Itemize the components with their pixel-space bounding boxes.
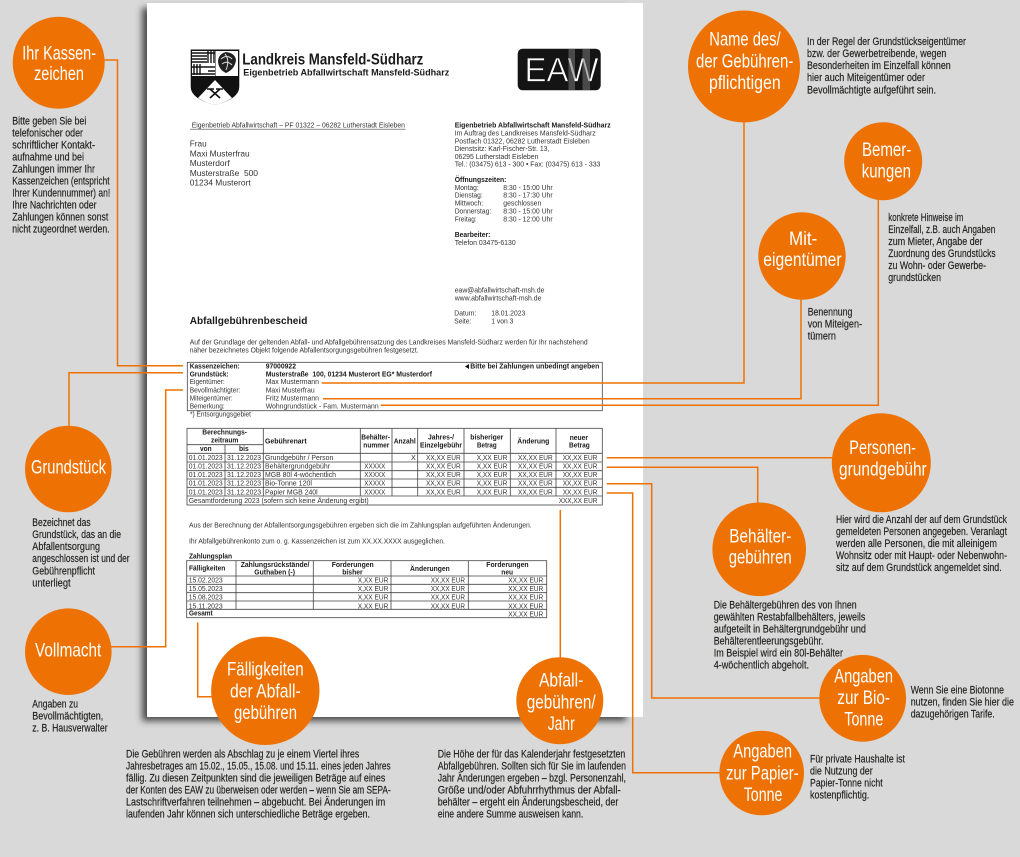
text: Name: In der Regel der Grundstückseigentümer (807, 36, 966, 48)
text: Miteigentümer: tümern (808, 331, 836, 343)
callout: Ihr Kassenzeichen (12, 17, 183, 366)
text: Bemerkungen: zum Mieter, Angabe der (888, 236, 983, 248)
payment plan table: X,XX EUR (358, 593, 388, 602)
text: Behältergebühren: 4-wöchentlich abgeholt. (714, 660, 809, 672)
fee table: Bio-Tonne 120l (265, 479, 312, 488)
fee table: Behältergrundgebühr (265, 462, 331, 471)
intro paragraph (190, 337, 588, 354)
fee table: XX,XX EUR (563, 470, 597, 479)
fee table: XX,XX EUR (518, 487, 553, 496)
fee table: XX,XX EUR (426, 453, 461, 462)
fee table: 31.12.2023 (227, 462, 261, 471)
callout: Miteigentümer (323, 212, 862, 399)
text: Kassenzeichen: Bitte geben Sie bei (12, 116, 86, 128)
text: Grundstück: unterliegt (32, 577, 71, 589)
payment plan table: neu (501, 567, 513, 576)
circle: Bemerkungen: kungen (862, 160, 911, 182)
text: Grundstück: Gebührenpflicht (32, 565, 95, 577)
fee table: XX,XX EUR (426, 487, 461, 496)
connector: Grundstück (69, 373, 183, 426)
circle: Grundstück (25, 426, 112, 512)
payment plan table: XX,XX EUR (431, 593, 465, 602)
account details box: Fritz Mustermann (266, 393, 319, 402)
text: Fälligkeiten (126, 749, 391, 821)
page shadow (142, 8, 626, 721)
circle: Papier-Tonne: zur Papier- (726, 762, 799, 784)
text: Kassenzeichen: Ihrer Kundennummer) an! (12, 188, 110, 200)
explanatory notes (189, 521, 532, 545)
sender contact block: Im Auftrag des Landkreises Mansfeld-Südharz (455, 128, 596, 137)
recipient address: 01234 Musterort (190, 178, 251, 188)
fee table: XX,XX EUR (563, 487, 597, 496)
connector: Bio-Tonne (607, 484, 820, 698)
text: Fälligkeiten: Die Gebühren werden als Abschlag zu je einem Viertel ihres (126, 749, 359, 761)
case worker (455, 230, 516, 247)
text: Name: Besonderheiten im Einzelfall können (807, 60, 951, 72)
fee table: zeitraum (211, 435, 238, 444)
payment plan table: XX,XX EUR (508, 575, 543, 584)
text: Kassenzeichen: schriftlicher Kontakt- (12, 140, 95, 152)
fee table: Grundgebühr / Person (265, 453, 333, 462)
circle: Abfallgebühren: Jahr (548, 713, 575, 735)
text: Grundstück: Grundstück, das an die (32, 529, 121, 541)
circle: Name (688, 10, 800, 122)
fee table (187, 428, 602, 505)
recipient address: Maxi Musterfrau (190, 148, 250, 158)
text: Kassenzeichen: Zahlungen können sonst (12, 212, 108, 224)
case worker: Bearbeiter: (455, 230, 490, 239)
fee table: X,XX EUR (477, 453, 507, 462)
text: Miteigentümer (808, 307, 862, 343)
circle: Personengrundgebühr (832, 413, 931, 512)
icon: EAW logo: EAW (524, 52, 598, 90)
account details box: Max Mustermann (266, 377, 319, 386)
circle: Personengrundgebühr: grundgebühr (839, 459, 927, 481)
fee table: X,XX EUR (477, 479, 507, 488)
account details box: Bemerkung: (190, 401, 225, 410)
text: Vollmacht (32, 699, 108, 735)
fee table: XX,XX EUR (563, 462, 597, 471)
text: Papier-Tonne: die Nutzung der (810, 765, 873, 777)
connector: Abfallgebühren (559, 510, 561, 658)
text: Abfallgebühren: Größe und/oder Abfuhrrhythmus der Abfall- (438, 785, 621, 797)
connector: Bemerkungen (381, 199, 878, 405)
text: Grundstück (32, 517, 130, 589)
text: Behältergebühren: gewählten Restabfallbehälters, jeweils (714, 612, 865, 624)
text: Behältergebühren: aufgeteilt in Behältergrundgebühr und (714, 624, 866, 636)
text: Abfallgebühren: Jahr Änderungen ergeben – bzgl. Personenzahl, (438, 773, 626, 785)
text: Abfallgebühren: Die Höhe der für das Kalenderjahr festgesetzten (438, 749, 625, 761)
web contact and date: Datum: (454, 309, 476, 318)
payment plan table: 15.08.2023 (189, 593, 223, 602)
payment plan table: X,XX EUR (358, 601, 388, 610)
text: Abfallgebühren: Abfallgebühren. Sollten sich für Sie im laufenden (438, 761, 626, 773)
payment plan table: Zahlungsplan (189, 551, 232, 560)
fee table: XX,XX EUR (426, 479, 461, 488)
fee table: Berechnungs- (202, 428, 248, 437)
web contact and date: 18.01.2023 (491, 309, 525, 318)
connector: Papier-Tonne (607, 493, 720, 773)
fee table: 31.12.2023 (227, 453, 261, 462)
fee table: Anzahl (394, 436, 416, 445)
payment plan table: 15.05.2023 (189, 584, 223, 593)
panel: fee notice document (147, 3, 643, 717)
circle: Bio-Tonne (819, 655, 906, 742)
sender contact block (455, 120, 611, 169)
text: Kassenzeichen (12, 116, 110, 236)
circle: Papier-Tonne: Tonne (744, 784, 782, 806)
icon: coat of arms (191, 50, 239, 105)
circle: Fälligkeiten (211, 637, 320, 745)
fee table: nummer (363, 440, 389, 449)
fee table: 01.01.2023 (189, 453, 223, 462)
fee table: 01.01.2023 (189, 487, 223, 496)
fee table: XXXXX (364, 487, 385, 496)
fee table: Änderung (517, 437, 549, 446)
fee table: X,XX EUR (477, 487, 507, 496)
payment plan table: XX,XX EUR (508, 593, 543, 602)
connector: Name (322, 121, 744, 383)
intro paragraph: näher bezeichnetes Objekt folgende Abfallentsorgungsgebühren festgesetzt. (190, 345, 419, 354)
payment plan table: XX,XX EUR (431, 601, 465, 610)
fee table: Behälter- (361, 432, 391, 441)
text: Kassenzeichen: nicht zugeordnet werden. (12, 224, 110, 236)
account details box: Bevollmächtigter: (190, 385, 240, 394)
text: Fälligkeiten: fällig. Zu diesen Zeitpunkten sind die jeweiligen Beträge auf eines (126, 773, 385, 785)
payment plan table (187, 551, 547, 619)
callout: Bemerkungen (381, 122, 996, 405)
fee table: Gesamtforderung 2023 (sofern sich keine Änderung ergibt) (189, 496, 369, 505)
connector: Miteigentümer (323, 299, 801, 399)
text: Bio-Tonne: dazugehörigen Tarife. (911, 708, 995, 720)
fee table: Einzelgebühr (420, 440, 462, 449)
fee table: 01.01.2023 (189, 470, 223, 479)
recipient address: Musterdorf (190, 158, 230, 168)
opening hours: Donnerstag: (455, 207, 491, 216)
circle: Miteigentümer (758, 212, 846, 300)
circle: Name: der Gebühren- (696, 51, 793, 73)
circle: Kassenzeichen (13, 17, 105, 109)
account details box: Maxi Musterfrau (266, 385, 315, 394)
circle: Bemerkungen (844, 122, 922, 200)
text: Name: hier auch Miteigentümer oder (807, 72, 925, 84)
fee table: XX,XX EUR (518, 462, 553, 471)
opening hours: 8:30 - 15:00 Uhr (503, 183, 553, 192)
heading: district name (242, 51, 450, 79)
connector: Fälligkeiten (198, 622, 213, 697)
explanatory notes: Aus der Berechnung der Abfallentsorgungsgebühren ergeben sich die im Zahlungsplan aufgeführten Änderungen. (189, 521, 532, 530)
fee table: XX,XX EUR (518, 453, 553, 462)
account details box: Musterstraße 100, 01234 Musterort EG* Musterdorf (266, 369, 433, 378)
account details box: Wohngrundstück - Fam. Mustermann (266, 401, 379, 410)
text: Vollmacht: Angaben zu (32, 699, 78, 711)
fee table: bis (239, 444, 249, 453)
fee table: 01.01.2023 (189, 462, 223, 471)
text: Vollmacht: z. B. Hausverwalter (32, 723, 108, 735)
fee table: XX,XX EUR (518, 479, 553, 488)
web contact and date: www.abfallwirtschaft-msh.de (454, 293, 541, 302)
text: Fälligkeiten: Jahresbetrages am 15.02., 15.05., 15.08. und 15.11. eines jeden Jahres (126, 761, 391, 773)
account details box: Eigentümer: (190, 377, 225, 386)
payment plan table: XX,XX EUR (508, 584, 543, 593)
fee table: X,XX EUR (477, 462, 507, 471)
fee table: von (200, 444, 212, 453)
text: Name: Bevollmächtigte aufgeführt sein. (807, 84, 936, 96)
fee table: Betrag (477, 440, 497, 449)
account details box: *) Entsorgungsgebiet (190, 409, 251, 418)
text: Kassenzeichen: aufnahme und bei (12, 152, 84, 164)
text: Miteigentümer: von Miteigen- (808, 319, 862, 331)
callout: Grundstück (25, 373, 183, 589)
document title: Abfallgebührenbescheid (190, 315, 307, 327)
recipient address: Musterstraße 500 (190, 168, 258, 178)
sender contact block: Dienstsitz: Karl-Fischer-Str. 13, (455, 144, 549, 153)
circle: Bemerkungen: Bemer- (862, 139, 911, 161)
payment plan table: XX,XX EUR (508, 610, 543, 619)
circle: Papier-Tonne (719, 731, 804, 815)
case worker: Telefon 03475-6130 (455, 238, 516, 247)
payment plan table: Forderungen (486, 560, 529, 569)
fee table: Jahres-/ (428, 432, 454, 441)
text: Fälligkeiten: laufenden Jahr können sich unterschiedliche Beträge ergeben. (126, 809, 370, 821)
fee table: Papier MGB 240l (265, 487, 318, 496)
connector: Behältergebühren (607, 467, 758, 504)
circle: Behältergebühren: Behälter- (729, 525, 791, 547)
account details box: Miteigentümer: (190, 393, 233, 402)
callout: Personengrundgebühr (607, 413, 1008, 574)
account details box: Grundstück: (190, 369, 229, 378)
circle: Name: Name des/ (709, 29, 781, 51)
fee table: XX,XX EUR (518, 470, 553, 479)
text: Bemerkungen: zu Wohn- oder Gewerbe- (888, 260, 986, 272)
circle: Fälligkeiten: gebühren (234, 702, 297, 724)
text: Behältergebühren (714, 600, 866, 672)
circle: Vollmacht: Vollmacht (35, 640, 102, 662)
callout: Behältergebühren (607, 467, 866, 672)
circle: Bio-Tonne: Angaben (834, 665, 893, 687)
explanatory notes: Ihr Abfallgebührenkonto zum o. g. Kassenzeichen ist zum XX.XX.XXXX ausgeglichen. (189, 536, 445, 545)
opening hours: Montag: (455, 183, 479, 192)
fee table: 31.12.2023 (227, 479, 261, 488)
fee table: XX,XX EUR (563, 479, 597, 488)
fee table: XXXXX (364, 462, 385, 471)
circle: Papier-Tonne: Angaben (733, 741, 792, 763)
sender contact block: Postfach 01322, 06282 Lutherstadt Eisleben (455, 136, 590, 145)
connector: Personengrundgebühr (607, 457, 833, 459)
text: Grundstück: Abfallentsorgung (32, 541, 100, 553)
text: Bemerkungen: Zuordnung des Grundstücks (888, 248, 996, 260)
payment plan table: 15.11.2023 (189, 601, 223, 610)
sender contact block: 06295 Lutherstadt Eisleben (455, 152, 538, 161)
callout: Angaben zur Papier-Tonne (607, 493, 905, 815)
opening hours: 8:30 - 15:00 Uhr (503, 207, 553, 216)
callout: Fälligkeiten (126, 622, 391, 821)
payment plan table: bisher (342, 567, 363, 576)
payment plan table: Guthaben (-) (254, 568, 296, 577)
text: Kassenzeichen: Zahlungen immer Ihr (12, 164, 95, 176)
callout: Abfallgebühren pro Jahr (438, 510, 626, 821)
recipient address: Frau (190, 139, 207, 149)
text: Papier-Tonne (810, 753, 905, 801)
text: Kassenzeichen: Kassenzeichen (entspricht (12, 176, 110, 188)
fee table: bisheriger (470, 432, 503, 441)
callout: Vollmacht (25, 390, 183, 735)
text: Abfallgebühren (438, 749, 626, 821)
text: Abfallgebühren: behälter – ergeht ein Änderungsbescheid, der (438, 797, 619, 809)
circle: Personengrundgebühr: Personen- (849, 437, 916, 459)
sender contact block: Tel.: (03475) 613 - 300 • Fax: (03475) 613 - 333 (455, 160, 600, 169)
heading: district name: Landkreis Mansfeld-Südharz (242, 51, 424, 68)
connector: Kassenzeichen (104, 60, 183, 366)
recipient address (190, 139, 258, 188)
web contact and date (454, 285, 544, 326)
opening hours (455, 175, 553, 223)
text: Fälligkeiten: der Konten des EAW zu überweisen oder werden – wenn Sie am SEPA- (126, 785, 391, 797)
payment plan table: Änderungen (410, 564, 450, 573)
text: Kassenzeichen: Ihre Nachrichten oder (12, 200, 97, 212)
payment plan table: X,XX EUR (358, 575, 388, 584)
fee table: XX,XX EUR (426, 470, 461, 479)
text: Name: bzw. der Gewerbetreibende, wegen (807, 48, 946, 60)
circle: Miteigentümer: eigentümer (763, 249, 842, 271)
circle: Fälligkeiten: Fälligkeiten (227, 659, 304, 681)
fee table: XX,XX EUR (426, 462, 461, 471)
payment plan table: Fälligkeiten (189, 563, 225, 572)
payment plan table: Gesamt (189, 608, 213, 618)
payment plan table: Forderungen (332, 560, 374, 569)
text: Fälligkeiten: Lastschriftverfahren teilnehmen – abgebucht. Bei Änderungen im (126, 797, 385, 809)
heading: district name: Eigenbetrieb Abfallwirtschaft Mansfeld-Südharz (243, 68, 450, 79)
payment plan table: XX,XX EUR (431, 584, 465, 593)
callout: Angaben zur Bio-Tonne (607, 484, 1014, 742)
text: Miteigentümer: Benennung (808, 307, 852, 319)
opening hours: 8:30 - 17:30 Uhr (503, 191, 553, 200)
web contact and date: eaw@abfallwirtschaft-msh.de (455, 285, 544, 294)
text: Grundstück: Bezeichnet das (32, 517, 91, 529)
sender line: Eigenbetrieb Abfallwirtschaft – PF 01322 – 06282 Lutherstadt Eisleben (192, 121, 405, 130)
circle: Abfallgebühren: Abfall- (539, 670, 583, 692)
text: Vollmacht: Bevollmächtigten, (32, 711, 103, 723)
circle: Miteigentümer: Mit- (789, 228, 817, 250)
circle: Bio-Tonne: zur Bio- (837, 687, 890, 709)
fee table: Betrag (569, 441, 590, 450)
fee table: XXX,XX EUR (559, 496, 597, 505)
web contact and date: 1 von 3 (491, 317, 513, 326)
text: Bio-Tonne (911, 684, 1014, 720)
fee table: 01.01.2023 (189, 479, 223, 488)
fee table: 31.12.2023 (227, 470, 261, 479)
fee table: 31.12.2023 (227, 487, 261, 496)
text: Bemerkungen: konkrete Hinweise im (888, 212, 963, 224)
text: Behältergebühren: Im Beispiel wird ein 80l-Behälter (714, 648, 843, 660)
payment plan table: XX,XX EUR (508, 601, 543, 610)
opening hours: 8:30 - 12:00 Uhr (503, 214, 553, 223)
opening hours: Mittwoch: (455, 199, 483, 208)
text: Papier-Tonne: Papier-Tonne nicht (810, 777, 883, 789)
circle: Abfallgebühren (516, 657, 603, 744)
opening hours: geschlossen (503, 199, 541, 208)
fee table: Gebührenart (265, 436, 307, 445)
payment plan table: Zahlungsrückstände/ (241, 560, 309, 569)
text: Behältergebühren: Die Behältergebühren des von Ihnen (714, 600, 857, 612)
payment plan table: XX,XX EUR (431, 575, 465, 584)
circle: Grundstück: Grundstück (31, 456, 106, 478)
web contact and date: Seite: (454, 317, 471, 326)
text: Kassenzeichen: telefonischer oder (12, 128, 83, 140)
circle: Bio-Tonne: Tonne (844, 709, 883, 731)
opening hours: Freitag: (455, 214, 477, 223)
opening hours: Dienstag: (455, 191, 483, 200)
intro paragraph: Auf der Grundlage der geltenden Abfall- und Abfallgebührensatzung des Landkreises Mansfeld-Südharz werden für Ihr nachstehend (190, 337, 588, 346)
fee table: neuer (570, 433, 588, 442)
text: Personengrundgebühr (835, 514, 1008, 574)
payment plan table: 15.02.2023 (189, 575, 223, 584)
fee table: XX,XX EUR (563, 453, 597, 462)
account details box: Kassenzeichen: (190, 361, 240, 370)
text: Bemerkungen: grundstücken (888, 272, 941, 284)
text: Papier-Tonne: kostenpflichtig. (810, 789, 869, 801)
fee table: X (411, 453, 416, 462)
account details box (187, 361, 602, 418)
text: Bemerkungen (888, 212, 996, 284)
circle: Vollmacht (25, 608, 112, 695)
text: Behältergebühren: Behälterentleerungsgebühr. (714, 636, 823, 648)
fee table: XXXXX (364, 479, 385, 488)
circle: Name: pflichtigen (709, 72, 781, 94)
circle: Kassenzeichen: Ihr Kassen- (22, 42, 96, 64)
text: Name (807, 36, 966, 96)
text: Papier-Tonne: Für private Haushalte ist (810, 753, 905, 765)
circle: Abfallgebühren: gebühren/ (527, 691, 596, 713)
account details box: Bitte bei Zahlungen unbedingt angeben (470, 361, 599, 370)
payment plan table: X,XX EUR (358, 584, 388, 593)
fee table: XXXXX (364, 470, 385, 479)
callout: Name des Gebührenpflichtigen (322, 10, 966, 383)
sender contact block: Eigenbetrieb Abfallwirtschaft Mansfeld-Südharz (455, 120, 611, 129)
opening hours: Öffnungszeiten: (455, 175, 506, 184)
fee table: X,XX EUR (477, 470, 507, 479)
text: Grundstück: angeschlossen ist und der (32, 553, 130, 565)
circle: Behältergebühren (712, 502, 806, 596)
fee table: MGB 80l 4-wöchentlich (265, 470, 336, 479)
account details box: 97000922 (266, 361, 296, 370)
text: Abfallgebühren: eine andere Summe ausweisen kann. (438, 809, 583, 821)
circle: Behältergebühren: gebühren (729, 546, 792, 568)
connector: Vollmacht (110, 390, 183, 647)
circle: Kassenzeichen: zeichen (34, 63, 84, 85)
circle: Fälligkeiten: der Abfall- (230, 681, 301, 703)
